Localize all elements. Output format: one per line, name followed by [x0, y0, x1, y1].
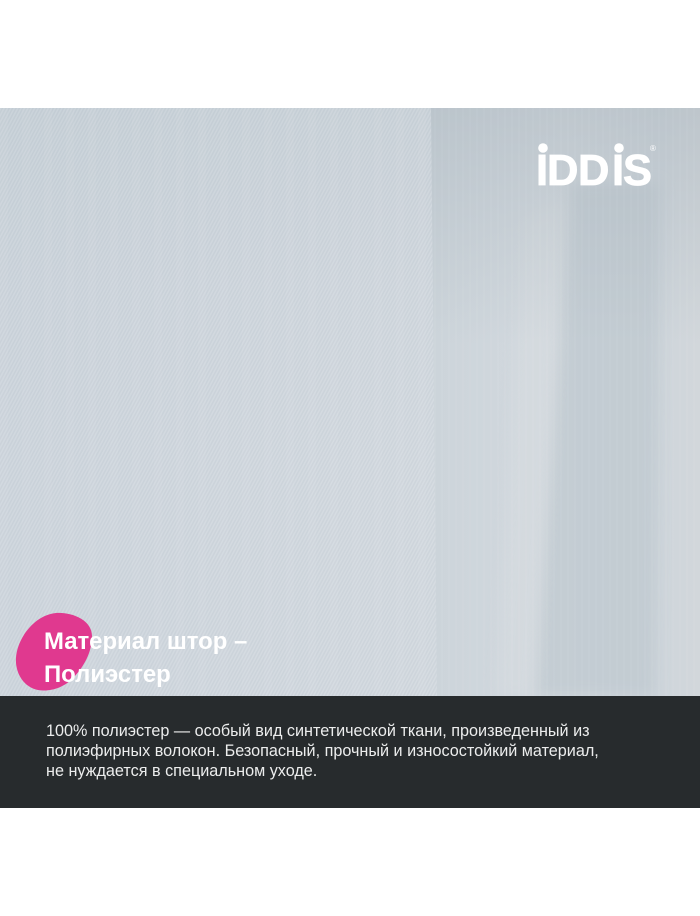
- panel: description band: [0, 696, 700, 808]
- text block: description: не нуждается в специальном уходе.: [46, 762, 317, 780]
- heading: Материал штор –: [44, 628, 247, 655]
- fabric photo background: [0, 108, 700, 696]
- icon: pink blob behind heading: [16, 612, 92, 690]
- heading: Полиэстер: [44, 660, 171, 688]
- text block: description: 100% полиэстер — особый вид синтетической ткани, произведенный из: [46, 722, 590, 740]
- logo: IDDIS: ®: [650, 144, 656, 153]
- text block: description: полиэфирных волокон. Безопасный, прочный и износостойкий материал,: [46, 742, 599, 760]
- text block: description: [46, 722, 599, 780]
- heading: [44, 628, 247, 688]
